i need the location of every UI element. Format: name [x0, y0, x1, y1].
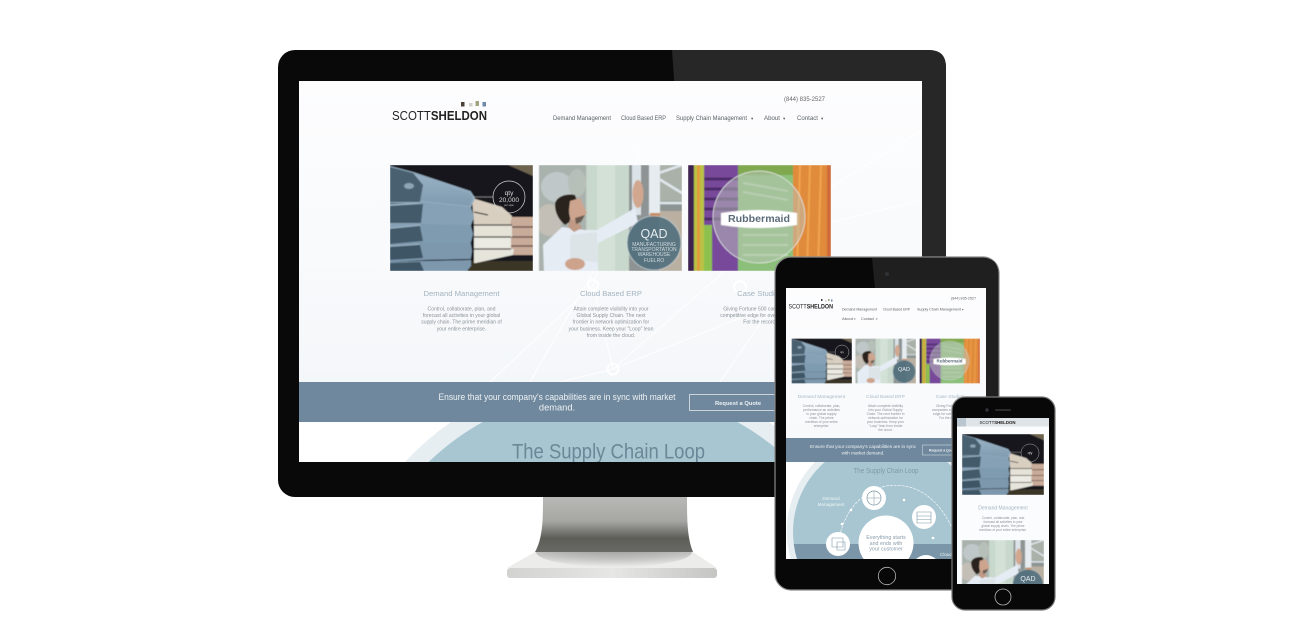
tablet supply chain loop diagram: [786, 462, 952, 559]
phone header: SCOTTSHELDON: [980, 420, 1016, 425]
tablet photo: shirts: qty: [840, 350, 844, 354]
tablet: [775, 257, 999, 590]
column: case studies: [720, 290, 774, 324]
tablet navigation: Supply Chain Management: [917, 306, 962, 312]
photo: folded shirts: qty: [505, 190, 514, 197]
column: case studies: For the record.: [743, 320, 777, 326]
tablet logo: [788, 299, 833, 308]
icon: documents: [912, 505, 936, 529]
tablet column: demand management: chain. The prime: [809, 416, 834, 420]
call to action banner: Request a Quote: [715, 401, 762, 407]
phone photo: worker: QAD: [1020, 576, 1036, 583]
phone section: demand management: forecast all activities in your: [984, 520, 1023, 524]
monitor screen: [299, 81, 922, 464]
phone section: demand management: Control, collaborate, plan, and: [982, 516, 1024, 520]
phone section: demand management: global supply chain. The prime: [981, 524, 1025, 528]
tablet navigation: ▾: [854, 317, 856, 321]
navigation menu: [554, 116, 824, 122]
column: demand management: Control, collaborate, plan, and: [428, 306, 496, 312]
photo: warehouse worker: MANUFACTURING: [632, 242, 676, 248]
tablet column: demand management: [798, 394, 846, 428]
tablet navigation: Demand Management: [842, 306, 878, 312]
tablet column: demand management: performance an activities: [803, 408, 840, 412]
photo: Rubbermaid bins: Rubbermaid: [728, 213, 790, 225]
column: demand management: supply chain. The prime meridian of: [421, 320, 502, 326]
tablet column: demand management: meridian of your entire: [805, 420, 838, 424]
photo: warehouse worker: WAREHOUSE: [638, 252, 671, 258]
phone section: demand management: [978, 506, 1028, 532]
tablet column: cloud based ERP: into your Global Supply: [868, 408, 903, 412]
customer circle: Everything starts: [866, 535, 906, 541]
column: cloud based ERP: Attain complete visibility into your: [573, 306, 649, 312]
navigation menu: About: [764, 115, 780, 122]
tablet navigation: About: [842, 316, 854, 321]
tablet column: cloud based ERP: your business. Keep your: [867, 420, 905, 424]
loop nodes: [841, 499, 934, 539]
column: case studies: Giving Fortune 500 companies a: [723, 306, 797, 312]
site logo: [392, 101, 486, 120]
tablet column: cloud based ERP: the cloud.: [878, 428, 893, 432]
tablet column: cloud based ERP: network optimization for: [868, 416, 904, 420]
photo: folded shirts: per style: [504, 204, 514, 207]
column: cloud based ERP: Global Supply Chain. The next: [576, 313, 646, 319]
photo: folded shirts: [390, 165, 533, 271]
phone header: [957, 418, 1049, 426]
tablet photo: worker: QAD: [898, 367, 910, 373]
tablet screen: [786, 288, 986, 583]
tablet navigation: Cloud Based ERP: [883, 306, 910, 312]
tablet column: case studies: companies a competitive: [932, 408, 968, 412]
site logo: SCOTTSHELDON: [392, 108, 487, 123]
loop label: Demand: [822, 496, 840, 501]
tablet logo: SCOTTSHELDON: [788, 304, 833, 310]
tablet home button: [878, 567, 896, 585]
photo: folded shirts: 20,000: [499, 197, 519, 204]
supply chain loop section: The Supply Chain Loop: [512, 440, 705, 464]
tablet navigation: Contact: [861, 316, 875, 321]
tablet banner: [786, 438, 952, 462]
tablet navigation: [842, 308, 964, 320]
tablet column: case studies: [932, 394, 964, 419]
tablet column: case studies: For the record.: [939, 416, 961, 420]
icon: screens: [826, 532, 850, 556]
phone photo: worker: [962, 540, 1044, 584]
tablet column: cloud based ERP: "Loop" lean from inside: [869, 424, 903, 428]
column: cloud based ERP: Cloud Based ERP: [580, 289, 642, 298]
phone number: (844) 835-2527: [784, 96, 825, 103]
icon: bottom circle: [916, 555, 936, 559]
tablet photo: shirts: [792, 338, 852, 384]
customer circle: your customer: [869, 546, 903, 552]
column: case studies: Case Studies: [737, 289, 783, 298]
navigation menu: ▾: [821, 116, 824, 121]
tablet photo: bins: [920, 338, 980, 384]
customer circle: [858, 516, 914, 559]
tablet column: case studies: edge for over 20 years.: [933, 412, 967, 416]
smartphone: [952, 397, 1055, 610]
column: case studies: competitive edge for over 20 years.: [720, 313, 800, 319]
desktop monitor: [278, 50, 946, 578]
tablet column: cloud based ERP: Attain complete visibility: [868, 404, 903, 408]
loop label: [818, 496, 845, 507]
tablet column: case studies: Case Studies: [936, 394, 965, 400]
phone section: demand management: Demand Management: [978, 506, 1028, 512]
tablet column: demand management: enterprise.: [814, 424, 829, 428]
navigation menu: Contact: [797, 115, 818, 122]
customer circle: and ends with: [870, 541, 902, 547]
photo: warehouse worker: QAD: [640, 227, 668, 241]
phone home button: [995, 589, 1011, 605]
column: cloud based ERP: [569, 289, 654, 339]
phone screen: [957, 418, 1049, 601]
column: demand management: Demand Management: [423, 289, 500, 298]
supply chain loop section: [299, 422, 774, 462]
phone photo: shirts: [962, 434, 1044, 495]
tablet column: demand management: Demand Management: [798, 394, 846, 400]
tablet banner: Ensure that your company's capabilities are in sync: [810, 444, 917, 449]
call to action banner: demand.: [539, 402, 575, 412]
column: demand management: your entire enterprise.: [437, 326, 486, 332]
monitor bezel: [278, 50, 946, 497]
phone body: [952, 397, 1055, 610]
tablet navigation: ▾: [876, 317, 878, 321]
tablet banner: with market demand.: [842, 450, 884, 456]
column: demand management: forecast all activities in your global: [423, 313, 500, 319]
loop label: cloud: Cloud: [940, 552, 952, 557]
tablet column: cloud based ERP: Chain. The next frontier in: [867, 412, 905, 416]
photo: warehouse worker: [536, 165, 682, 271]
tablet column: case studies: Giving Fortune 500: [936, 404, 964, 408]
photo: Rubbermaid bins: [688, 165, 831, 271]
tablet banner: Request a Quote: [929, 448, 956, 452]
navigation menu: Demand Management: [553, 115, 611, 122]
tablet column: cloud based ERP: [866, 394, 905, 432]
tablet phone number: (844) 835-2527: [951, 296, 977, 300]
navigation menu: Cloud Based ERP: [621, 115, 666, 122]
navigation menu: ▾: [783, 116, 786, 121]
tablet photo: worker: [854, 338, 916, 384]
phone section: demand management: meridian of your entire enterprise.: [979, 528, 1027, 532]
tablet body: [775, 257, 999, 590]
tablet column: demand management: in your global supply: [806, 412, 837, 416]
navigation menu: Supply Chain Management: [676, 115, 747, 122]
column: cloud based ERP: your business. Keep your "Loop" lean: [569, 326, 654, 332]
column: demand management: [421, 289, 502, 332]
tablet photo: bins: Rubbermaid: [936, 358, 963, 364]
tablet column: demand management: Control, collaborate, plan,: [803, 404, 840, 408]
column: cloud based ERP: frontier in network optimization for: [573, 320, 650, 326]
tablet navigation: ▾: [962, 308, 964, 312]
column: cloud based ERP: from inside the cloud.: [587, 333, 635, 339]
phone photo: shirts: qty: [1028, 451, 1033, 455]
icon: globe: [862, 486, 886, 510]
tablet supply chain loop diagram: The Supply Chain Loop: [854, 468, 919, 475]
call to action banner: [299, 382, 774, 422]
tablet column: cloud based ERP: Cloud Based ERP: [866, 394, 905, 400]
loop label: Management: [818, 502, 845, 507]
navigation menu: ▾: [751, 116, 754, 121]
photo: warehouse worker: FUELRO: [644, 258, 664, 264]
photo: warehouse worker: TRANSPORTATION: [631, 247, 677, 253]
monitor stand: [507, 496, 717, 578]
call to action banner: Ensure that your company's capabilities are in sync with market: [438, 392, 676, 402]
